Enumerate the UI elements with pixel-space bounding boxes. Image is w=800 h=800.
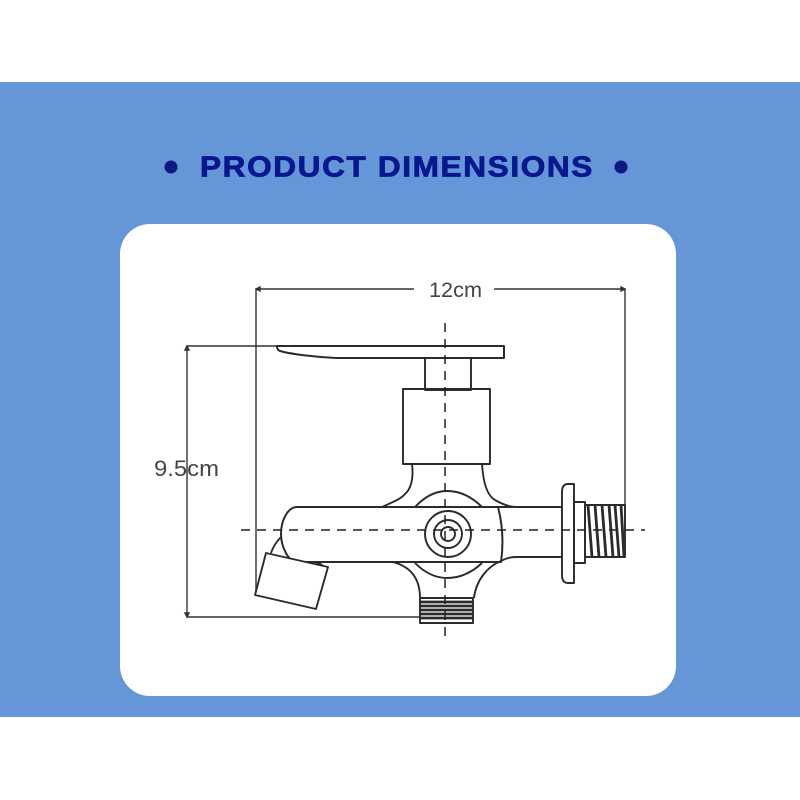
upper junction curves bbox=[382, 464, 516, 507]
bottom thread bbox=[420, 598, 473, 623]
title bbox=[164, 152, 628, 184]
height label: 9.5cm bbox=[154, 456, 219, 481]
title bullet left bbox=[164, 160, 178, 174]
side thread bbox=[585, 505, 625, 557]
hub circles bbox=[425, 511, 471, 557]
side collar bbox=[574, 502, 585, 563]
swivel nozzle bbox=[255, 537, 328, 609]
faucet drawing bbox=[255, 346, 625, 623]
width label: 12cm bbox=[429, 279, 482, 302]
panel: white card bbox=[120, 224, 676, 696]
valve body bbox=[403, 389, 490, 464]
main tube bbox=[281, 507, 502, 562]
title bullet right bbox=[614, 160, 628, 174]
dimension: width 12cm bbox=[256, 279, 625, 595]
central hub arcs bbox=[415, 491, 482, 578]
handle neck bbox=[425, 358, 471, 390]
side flange bbox=[562, 484, 574, 583]
handle lever bbox=[277, 346, 504, 358]
centre lines bbox=[241, 323, 645, 640]
title text: PRODUCT DIMENSIONS bbox=[200, 152, 594, 184]
side outlet stub bbox=[498, 507, 562, 561]
blue background band bbox=[0, 82, 800, 717]
dimension: height 9.5cm bbox=[154, 346, 420, 617]
lower junction curves bbox=[393, 561, 501, 598]
